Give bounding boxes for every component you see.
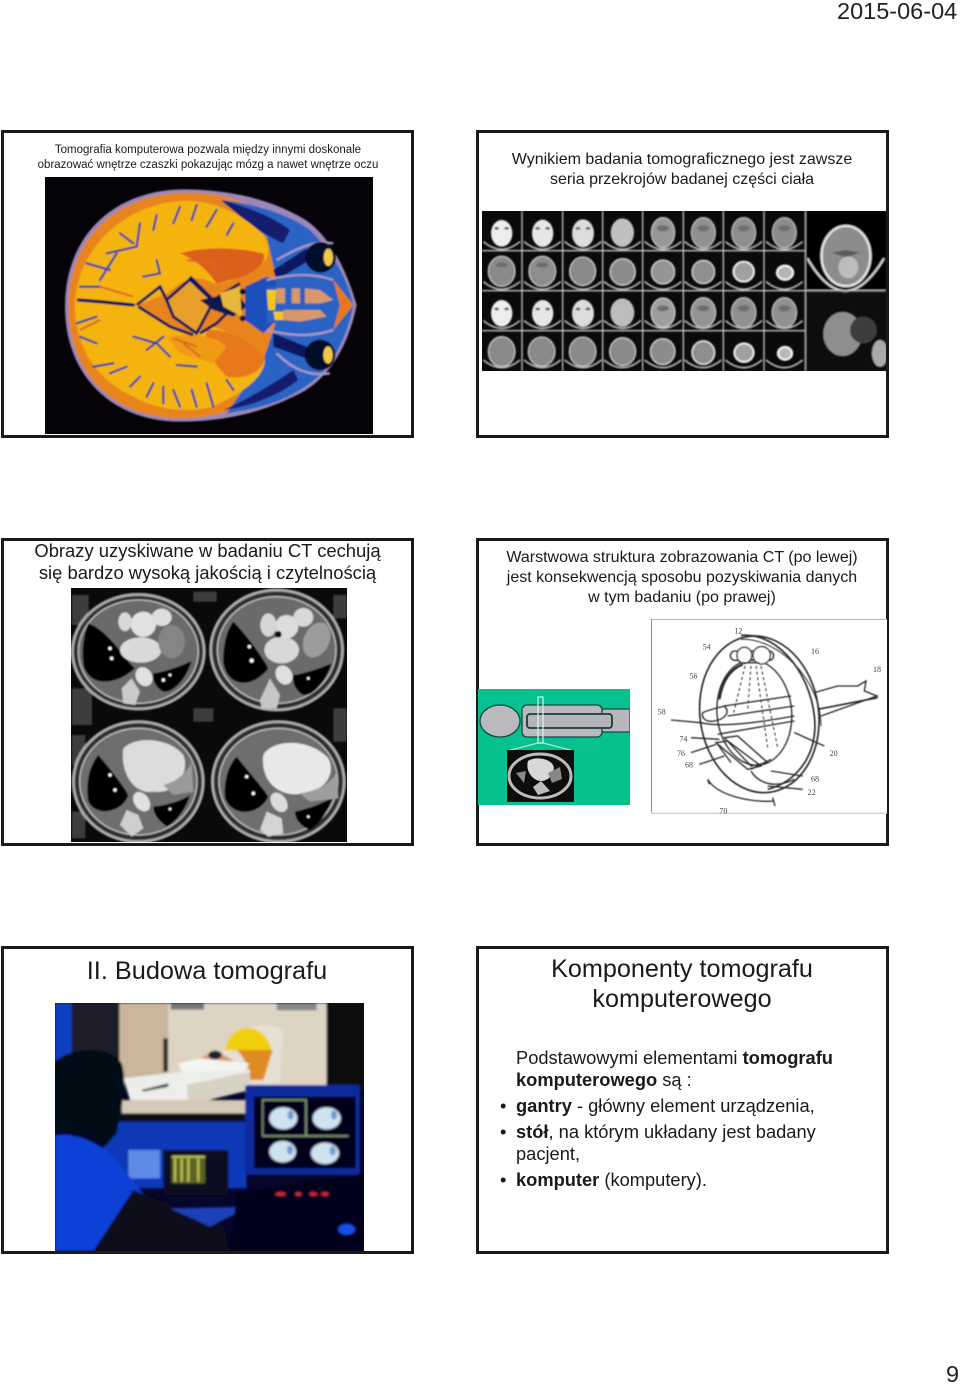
diagram: patient slice schematic on green [478, 689, 630, 805]
text: image quality caption: Obrazy uzyskiwane w badaniu CT cechują [34, 540, 381, 561]
diagram: gantry patent drawing: 68 [811, 774, 819, 783]
text: brain slide caption [38, 144, 378, 171]
panel: components slide [476, 946, 889, 1254]
bullet: computer: • [500, 1169, 506, 1190]
scan top-right [211, 590, 343, 710]
heading: Komponenty tomografu komputerowego: Komponenty tomografu [551, 955, 813, 983]
scan bottom-right [212, 722, 344, 842]
text: brain slide caption: obrazować wnętrze czaszki pokazując mózg a nawet wnętrze oczu [38, 159, 378, 171]
diagram: gantry patent drawing: 16 [811, 647, 819, 656]
diagram: gantry patent drawing: 68 [685, 761, 693, 770]
page number: 9 [946, 1361, 959, 1387]
panel: image quality slide [1, 538, 414, 846]
text: layered structure caption [506, 549, 858, 606]
diagram: gantry patent drawing: 18 [873, 665, 881, 674]
image: four chest CT scans [71, 588, 347, 842]
heading: II. Budowa tomografu: II. Budowa tomografu [87, 957, 327, 985]
text: layered structure caption: jest konsekwencją sposobu pozyskiwania danych [507, 569, 857, 586]
text block: components list [500, 1047, 833, 1190]
intro sentence: Podstawowymi elementami tomografu [516, 1047, 833, 1068]
diagram: gantry patent drawing: 56 [689, 671, 697, 680]
diagram: gantry patent drawing: 58 [658, 708, 666, 717]
image: grid of CT head slices [482, 211, 886, 371]
diagram: gantry patent drawing: 20 [830, 749, 838, 758]
image: CT operator room photo [55, 1003, 364, 1251]
intro sentence [516, 1047, 833, 1090]
bullet: table: • [500, 1121, 506, 1142]
intro sentence: komputerowego są : [516, 1069, 692, 1090]
scan bottom-left [73, 722, 203, 842]
bullet: gantry: • [500, 1095, 506, 1116]
panel: brain scan slide [1, 130, 414, 438]
scan top-left [72, 594, 204, 709]
diagram: gantry patent drawing: 12 [734, 626, 742, 635]
text: image quality caption: się bardzo wysoką jakością i czytelnością [39, 562, 376, 583]
grid lines [482, 211, 886, 371]
heading: Komponenty tomografu komputerowego: komputerowego [592, 985, 772, 1013]
bullet: gantry: gantry - główny element urządzenia, [516, 1095, 815, 1116]
panel: series of cross-sections slide [476, 130, 889, 438]
diagram: gantry patent drawing: 76 [677, 749, 685, 758]
text: layered structure caption: Warstwowa struktura zobrazowania CT (po lewej) [506, 549, 858, 566]
text: layered structure caption: w tym badaniu (po prawej) [588, 589, 776, 606]
diagram: gantry patent drawing: 22 [808, 788, 816, 797]
image: colour MRI of brain [45, 177, 373, 434]
panel: layered structure slide [476, 538, 889, 846]
heading: Komponenty tomografu komputerowego [551, 955, 813, 1013]
text: cross-sections caption: seria przekrojów badanej części ciała [550, 171, 814, 188]
diagram: gantry patent drawing [651, 619, 887, 814]
text: cross-sections caption: Wynikiem badania tomograficznego jest zawsze [512, 151, 852, 168]
text: image quality caption [34, 540, 381, 583]
bullet: table: pacjent, [516, 1143, 580, 1164]
panel: scanner construction slide [1, 946, 414, 1254]
bullet: table [500, 1121, 816, 1164]
diagram: gantry patent drawing: 74 [679, 734, 687, 743]
text: brain slide caption: Tomografia komputerowa pozwala między innymi doskonale [55, 144, 361, 156]
bullet: computer: komputer (komputery). [516, 1169, 707, 1190]
text: cross-sections caption [512, 151, 852, 188]
enlarged slices [807, 212, 886, 291]
diagram: gantry patent drawing: 54 [703, 642, 711, 651]
bullet: table: stół, na którym układany jest badany [516, 1121, 816, 1142]
